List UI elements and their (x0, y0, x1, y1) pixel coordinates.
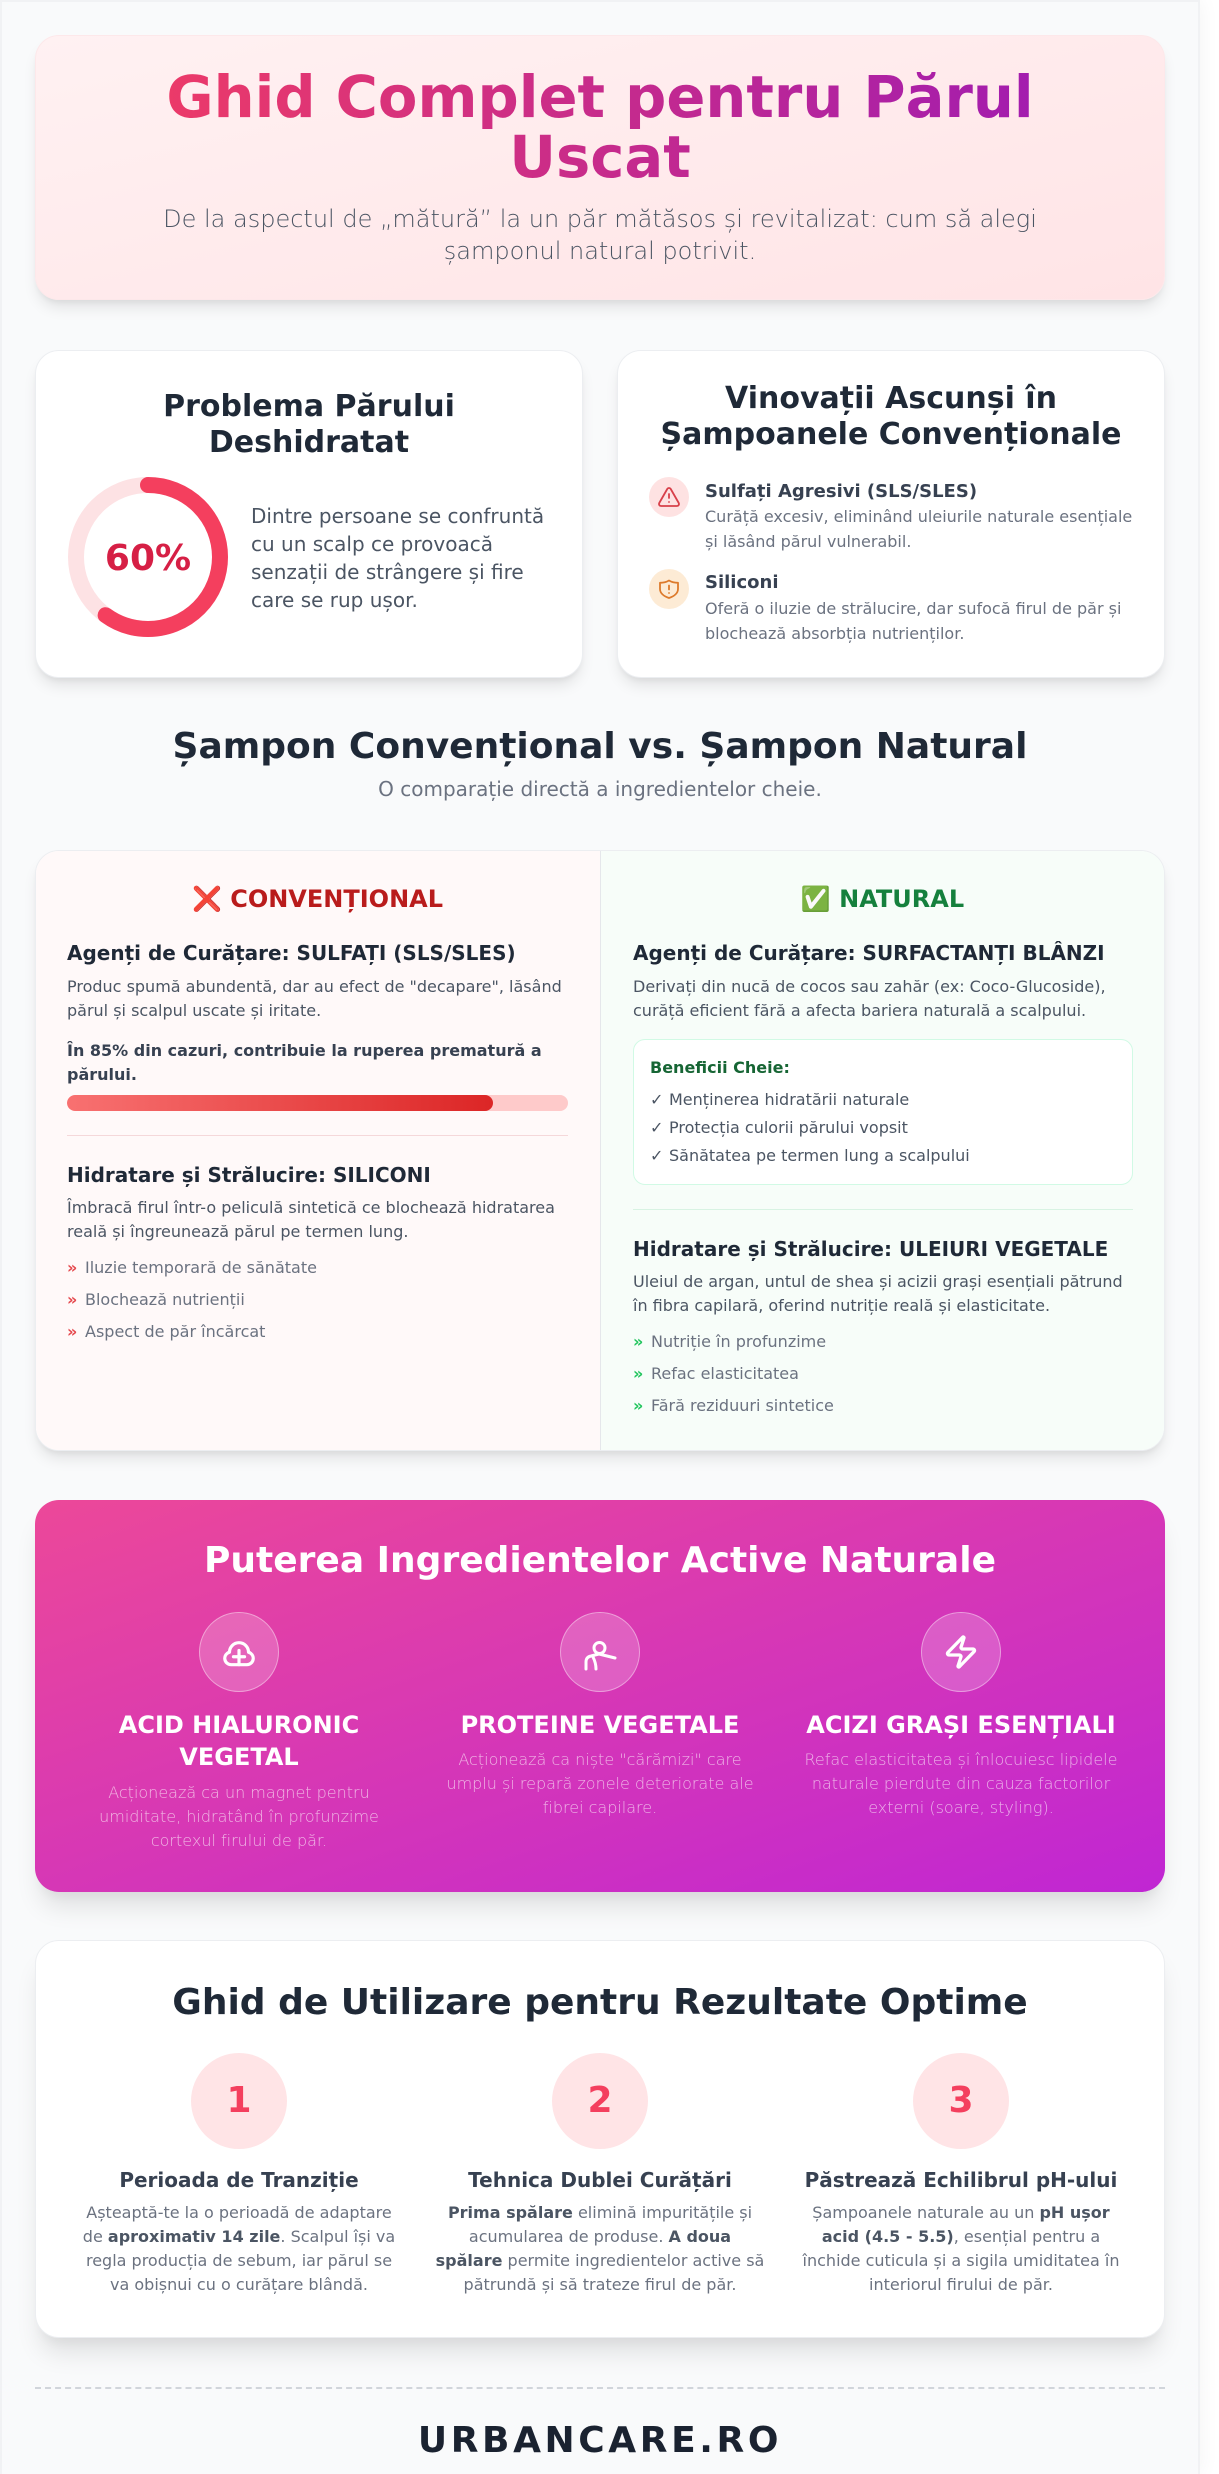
step number 2: 2 (587, 2080, 613, 2121)
ingredient text: proteine (446, 1750, 754, 1817)
column heading: natural: ✅ NATURAL (801, 885, 964, 913)
step text 2: Prima spălare elimină impuritățile și (448, 2203, 752, 2222)
bullet list: siliconi (67, 1258, 317, 1341)
heading: usage guide: Ghid de Utilizare pentru Rezultate Optime (172, 1982, 1028, 2023)
item: sulfati: Sulfați Agresivi (SLS/SLES) (705, 481, 977, 502)
text: surfactanti (633, 977, 1106, 1020)
bullet list: uleiuri: Nutriție în profunzime (651, 1332, 826, 1351)
ingredient text: acizi grasi: Refac elasticitatea și înlocuiesc lipidele (805, 1750, 1117, 1769)
text: uleiuri: în fibra capilară, oferind nutriție reală și elasticitate. (633, 1296, 1050, 1315)
text: » (633, 1364, 643, 1383)
step text 2: acumularea de produse. A doua (469, 2227, 731, 2246)
text: siliconi: Îmbracă firul într-o peliculă sintetică ce blochează hidratarea (67, 1198, 555, 1217)
ingredient text: acid hialuronic: Acționează ca un magnet pentru (108, 1783, 370, 1802)
subheading: surfactanti: Agenți de Curățare: SURFACTANȚI BLÂNZI (633, 941, 1105, 965)
item text: sulfati: și lăsând părul vulnerabil. (705, 532, 911, 550)
callout: beneficii cheie (633, 1039, 1133, 1185)
step text 1: de aproximativ 14 zile. Scalpul își va (83, 2227, 395, 2246)
subheading: uleiuri: Hidratare și Strălucire: ULEIURI VEGETALE (633, 1237, 1108, 1261)
stat description: cu un scalp ce provoacă (251, 532, 493, 556)
icon: person (560, 1612, 640, 1692)
progress fill (67, 1095, 493, 1111)
ingredient text: acizi grasi: externi (soare, styling). (868, 1798, 1054, 1817)
stat description: care se rup ușor. (251, 588, 418, 612)
ingredient text: acid hialuronic: cortexul firului de păr. (151, 1831, 327, 1850)
panel: comparison table (35, 850, 1165, 1451)
donut chart: 60%: 60% (104, 538, 191, 579)
benefits list: Sănătatea pe termen lung a scalpului (669, 1146, 970, 1165)
step text 2: pătrundă și să trateze firul de păr. (464, 2275, 736, 2294)
benefits list (650, 1090, 970, 1165)
icon: shield alert (649, 569, 689, 609)
bullet list: siliconi: Aspect de păr încărcat (85, 1322, 265, 1341)
ingredient text: acizi grasi: naturale pierdute din cauza factorilor (812, 1774, 1110, 1793)
ingredient title: acizi grasi: ACIZI GRAȘI ESENȚIALI (806, 1711, 1116, 1739)
stat description: senzații de strângere și fire (251, 560, 524, 584)
step text 1: Așteaptă-te la o perioadă de adaptare (86, 2203, 392, 2222)
callout: beneficii cheie: ✓ (650, 1118, 663, 1137)
stat text: 85% (67, 1041, 542, 1084)
icon: lightning bolt (921, 1612, 1001, 1692)
subtitle: șamponul natural potrivit. (444, 237, 756, 265)
subheading: siliconi: Hidratare și Strălucire: SILICONI (67, 1163, 431, 1187)
step number 1 (191, 2053, 287, 2149)
ingredient text: proteine: umplu și repară zonele deteriorate ale (446, 1774, 754, 1793)
step text 3: interiorul firului de păr. (869, 2275, 1053, 2294)
text: » (67, 1290, 77, 1309)
text: surfactanti: curăță eficient fără a afecta bariera naturală a scalpului. (633, 1001, 1086, 1020)
text: sulfati (67, 977, 562, 1020)
ingredient text: proteine: Acționează ca niște "cărămizi" care (458, 1750, 742, 1769)
heading: Problema Părului (163, 389, 455, 424)
heading: Vinovații Ascunși în (725, 381, 1057, 416)
heading: Deshidratat (209, 425, 409, 460)
text: uleiuri: Uleiul de argan, untul de shea și acizii grași esențiali pătrund (633, 1272, 1123, 1291)
text: siliconi: reală și îngreunează părul pe termen lung. (67, 1222, 408, 1241)
ingredient text: proteine: fibrei capilare. (543, 1798, 657, 1817)
ingredient text: acid hialuronic: umiditate, hidratând în profunzime (99, 1807, 379, 1826)
heading (661, 381, 1121, 452)
footer brand: URBANCARE.RO (418, 2420, 782, 2461)
step text 1: regla producția de sebum, iar părul se (86, 2251, 392, 2270)
stat text: 85%: În 85% din cazuri, contribuie la ruperea prematură a (67, 1041, 542, 1060)
stat description: Dintre persoane se confruntă (251, 504, 544, 528)
step number 3 (913, 2053, 1009, 2149)
text: sulfati: Produc spumă abundentă, dar au efect de "decapare", lăsând (67, 977, 562, 996)
title: Uscat (509, 124, 691, 191)
heading: active ingredients: Puterea Ingredientelor Active Naturale (204, 1540, 996, 1581)
text: sulfati: părul și scalpul uscate și iritate. (67, 1001, 321, 1020)
step text 2 (436, 2203, 764, 2294)
callout: beneficii cheie: ✓ (650, 1146, 663, 1165)
column heading: conventional: ❌ CONVENȚIONAL (192, 885, 443, 913)
step text 1 (83, 2203, 395, 2294)
benefits list: Menținerea hidratării naturale (669, 1090, 909, 1109)
bullet list: uleiuri: Refac elasticitatea (651, 1364, 799, 1383)
title (157, 68, 1043, 188)
benefits list: Protecția culorii părului vopsit (669, 1118, 908, 1137)
text: surfactanti: Derivați din nucă de cocos sau zahăr (ex: Coco-Glucoside), (633, 977, 1106, 996)
step title 1: Perioada de Tranziție (119, 2168, 359, 2192)
heading: Șampoanele Convenționale (661, 417, 1121, 452)
step title 2: Tehnica Dublei Curățări (468, 2168, 732, 2192)
text: » (633, 1332, 643, 1351)
item text: sulfati (705, 507, 1132, 550)
section subtitle: O comparație directă a ingredientelor cheie. (378, 777, 822, 801)
text: » (67, 1322, 77, 1341)
panel: vinovatii ascunsi (617, 350, 1165, 678)
step text 2: spălare permite ingredientelor active să (436, 2251, 764, 2270)
item text: siliconi (705, 599, 1121, 643)
subheading: sulfati: Agenți de Curățare: SULFAȚI (SLS/SLES) (67, 941, 516, 965)
step text 3: Șampoanele naturale au un pH ușor (812, 2203, 1110, 2222)
ingredient text: acizi grasi (805, 1750, 1117, 1817)
icon: cloud plus (199, 1612, 279, 1692)
step text 3 (802, 2203, 1119, 2294)
item text: sulfati: Curăță excesiv, eliminând uleiurile naturale esențiale (705, 507, 1132, 526)
subtitle: De la aspectul de „mătură” la un păr mătăsos și revitalizat: cum să alegi (163, 205, 1037, 233)
item: siliconi: Siliconi (705, 572, 778, 593)
callout: beneficii cheie: ✓ (650, 1090, 663, 1109)
stat text: 85%: părului. (67, 1065, 137, 1084)
text: siliconi (67, 1198, 555, 1241)
column: conventional background (36, 851, 601, 1452)
panel: header (35, 35, 1165, 300)
callout heading: Beneficii Cheie: (650, 1058, 790, 1077)
step number 2 (552, 2053, 648, 2149)
ingredient title: proteine: PROTEINE VEGETALE (461, 1711, 739, 1739)
bullet list: siliconi: Blochează nutrienții (85, 1290, 245, 1309)
ingredient text: acid hialuronic (99, 1783, 379, 1850)
step title 3: Păstrează Echilibrul pH-ului (805, 2168, 1117, 2192)
ingredient title: acid hialuronic: ACID HIALURONIC (119, 1711, 359, 1739)
subtitle (163, 205, 1037, 265)
icon: warning triangle (649, 477, 689, 517)
item text: siliconi: blochează absorbția nutrienților. (705, 624, 964, 642)
title: Ghid Complet pentru Părul (166, 64, 1034, 131)
text: » (633, 1396, 643, 1415)
step number 3: 3 (948, 2080, 974, 2121)
stat description (251, 504, 544, 612)
text: uleiuri (632, 1272, 1123, 1315)
ingredient title: acid hialuronic: VEGETAL (179, 1743, 299, 1771)
ingredient title: acid hialuronic (118, 1711, 359, 1771)
heading (163, 389, 455, 460)
bullet list: uleiuri (633, 1332, 834, 1415)
item text: siliconi: Oferă o iluzie de strălucire, dar sufocă firul de păr și (705, 599, 1121, 618)
panel: problema parului deshidratat (35, 350, 583, 678)
step text 3: acid (4.5 - 5.5), esențial pentru a (822, 2227, 1100, 2246)
panel: usage guide (35, 1940, 1165, 2338)
text: » (67, 1258, 77, 1277)
progress bar: 85% (67, 1095, 568, 1111)
column: natural background (601, 851, 1166, 1452)
bullet list: siliconi: Iluzie temporară de sănătate (85, 1258, 317, 1277)
step number 1: 1 (226, 2080, 252, 2121)
panel: active ingredients (35, 1500, 1165, 1892)
step text 1: va obișnui cu o curățare blândă. (110, 2275, 368, 2294)
donut chart: 60% (68, 477, 228, 637)
bullet list: uleiuri: Fără reziduuri sintetice (651, 1396, 834, 1415)
step text 3: închide cuticula și a sigila umiditatea în (803, 2251, 1119, 2270)
section heading: comparison: Șampon Convențional vs. Șampon Natural (173, 726, 1027, 767)
